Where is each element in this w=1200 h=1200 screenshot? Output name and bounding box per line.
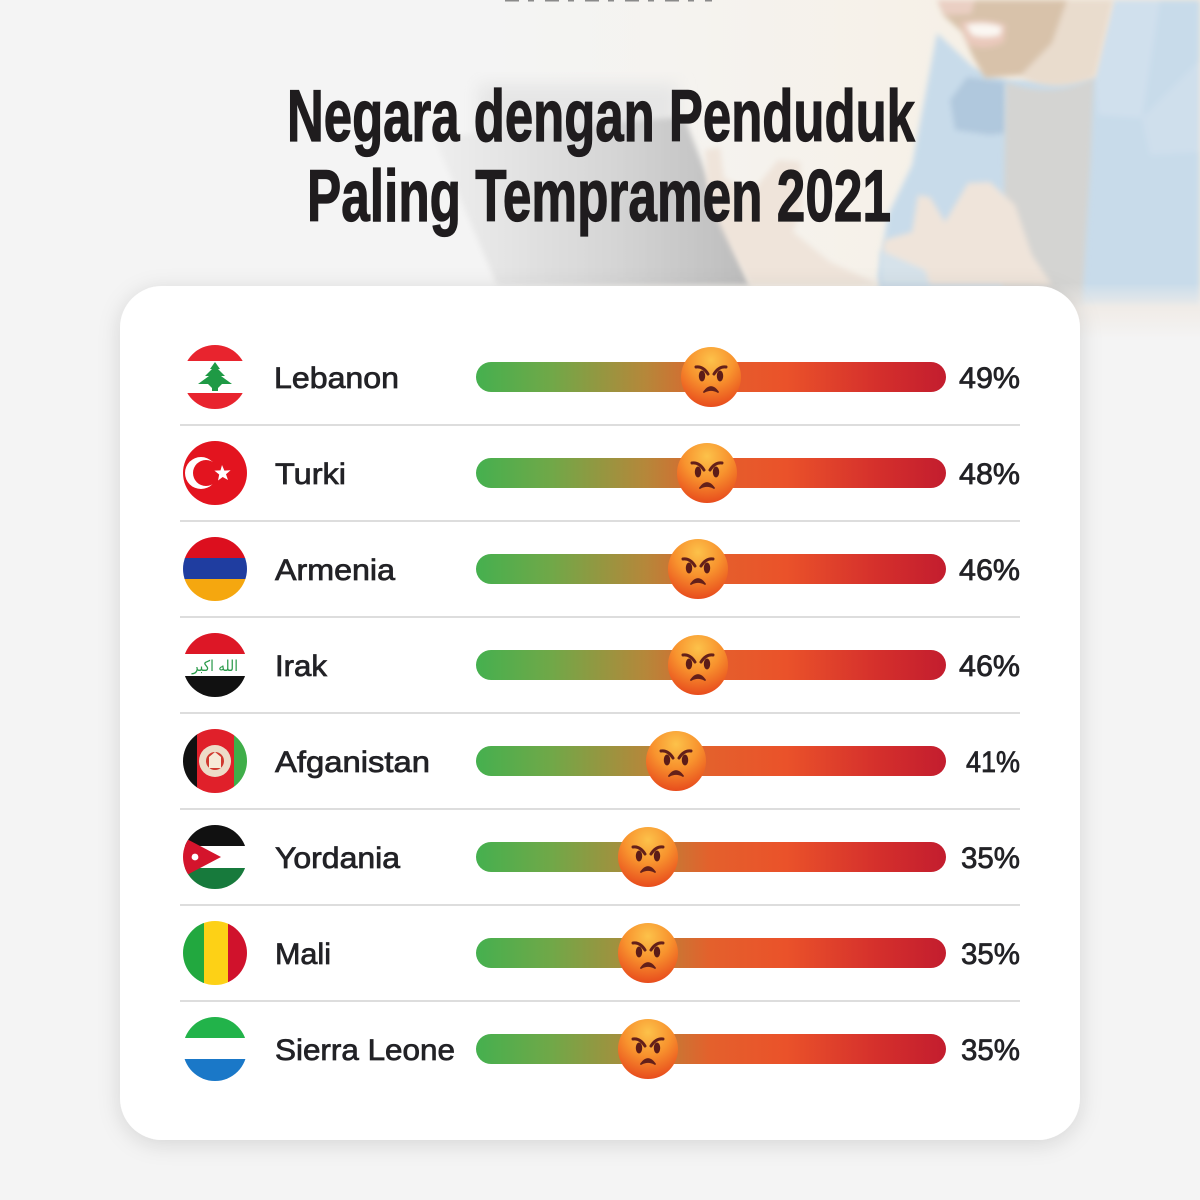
title: Paling Tempramen 2021 [307,156,891,237]
photo: laptop [434,84,750,285]
bar [476,362,946,392]
emoji marker [618,1019,678,1079]
label: Irak [275,650,328,683]
row: Sierra Leone [183,1017,1020,1081]
label: Afganistan [275,746,430,779]
photo: face, neck and beard [937,0,1113,86]
flag: Sierra Leone [183,1017,247,1081]
bar [476,650,946,680]
bar [476,842,946,872]
emoji marker [646,731,706,791]
row: Lebanon [183,345,1020,409]
title: Negara dengan Penduduk [287,76,915,157]
photo: grey t-shirt [1002,77,1094,306]
row: Irak [183,633,1020,697]
value: 48% [959,458,1020,491]
value: 46% [959,554,1020,587]
flag: Irak [183,633,247,697]
bar [476,554,946,584]
bar [476,1034,946,1064]
flag: Afganistan [183,729,248,793]
bar [476,938,946,968]
flag: Armenia [183,537,247,601]
photo: bottom fade [860,283,1200,339]
value: 35% [961,842,1020,875]
emoji marker [618,923,678,983]
label: Yordania [275,842,400,875]
emoji marker [681,347,741,407]
bar [476,746,946,776]
row: Armenia [183,537,1020,601]
label: Mali [275,938,331,971]
value: 46% [959,650,1020,683]
value: 35% [961,938,1020,971]
flag: Yordania [183,825,247,889]
photo: raised hands and forearm [705,147,1052,285]
label: Sierra Leone [275,1034,455,1067]
flag: Lebanon [187,345,243,409]
cut-off text at top edge [505,0,712,2]
photo: denim shirt [878,0,1200,306]
row: Turki [183,441,1020,505]
emoji marker [677,443,737,503]
bar [476,458,946,488]
emoji marker [668,635,728,695]
row: Mali [183,921,1020,985]
label: Lebanon [274,362,399,395]
flag: Turki [183,441,247,505]
panel: ranking card [120,286,1080,1140]
row: Afganistan [183,729,1020,793]
flag: Irak: الله اكبر [191,657,238,675]
title [287,76,915,237]
flag: Mali [183,921,248,985]
value: 49% [959,362,1020,395]
emoji marker [668,539,728,599]
row: Yordania [183,825,1020,889]
label: Turki [275,458,346,491]
label: Armenia [275,554,395,587]
emoji marker [618,827,678,887]
value: 41% [966,746,1020,779]
value: 35% [961,1034,1020,1067]
